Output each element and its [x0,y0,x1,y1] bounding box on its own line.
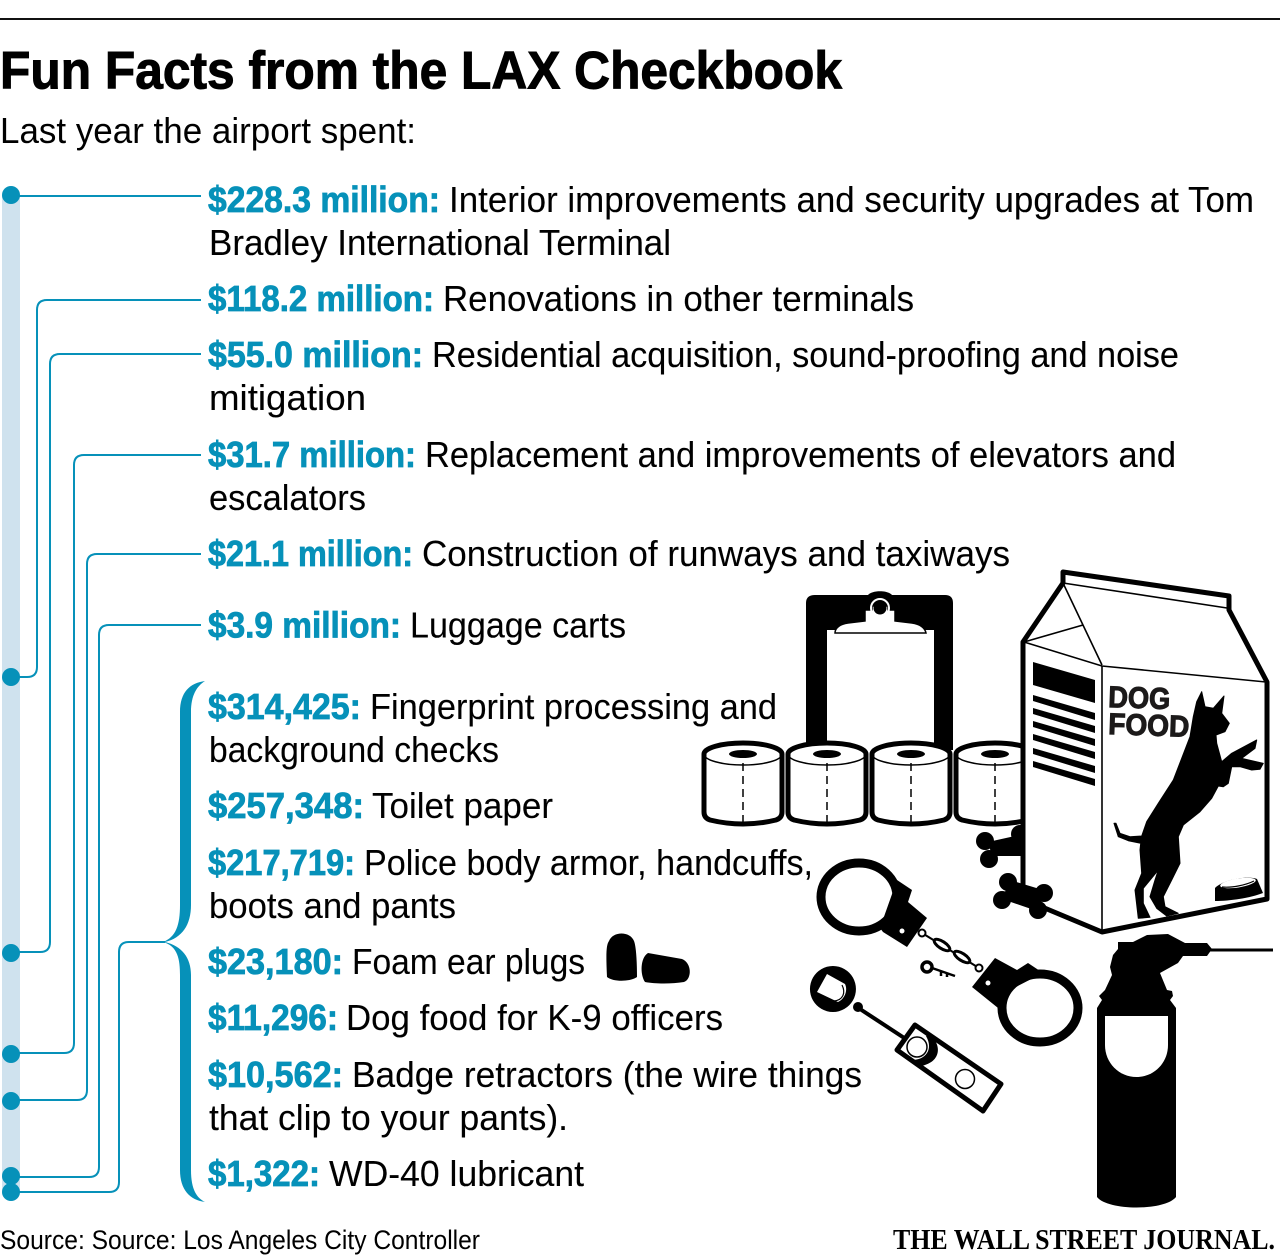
item: $55.0 million: mitigation [209,377,366,418]
dog silhouette [1114,692,1263,918]
item: $55.0 million [208,334,1179,418]
item: $11,296: $11,296: [208,997,338,1038]
key [922,962,955,977]
item: $55.0 million: Residential acquisition, sound-proofing and noise [432,334,1179,375]
icon: dog food carton [1023,572,1267,932]
item: $3.9 million: Luggage carts [410,604,626,646]
item: $257,348: Toilet paper [372,785,553,826]
item: $257,348 [208,785,553,826]
item: $228.3 million: $228.3 million: [208,179,440,220]
item: $314,425: $314,425: [208,686,361,727]
item: $23,180 [208,941,585,982]
item: $217,719: $217,719: [208,842,355,883]
item: $118.2 million: $118.2 million: [208,278,434,319]
icon: foam ear plugs [606,934,690,984]
carton label [1108,681,1190,744]
item: $314,425 [208,686,777,770]
item: $228.3 million: Interior improvements and security upgrades at Tom [449,179,1254,220]
item: $314,425: background checks [209,729,499,770]
item: $21.1 million: Construction of runways and taxiways [422,533,1010,574]
icon: WD-40 can [1097,934,1273,1208]
subtitle: Last year the airport spent: [0,110,416,151]
icon: toilet paper rolls [704,743,1034,824]
item: $23,180: Foam ear plugs [352,941,585,982]
dog bowl [1215,876,1263,901]
icon: badge retractor [810,966,1001,1111]
item: $10,562: that clip to your pants). [209,1097,568,1138]
item: $31.7 million: $31.7 million: [208,434,416,475]
chain [918,930,982,972]
item: $10,562: $10,562: [208,1054,343,1095]
item: $10,562: Badge retractors (the wire things [352,1054,862,1095]
source note: Source: Source: Los Angeles City Controller [0,1225,480,1255]
item: $10,562 [208,1054,862,1138]
title: Fun Facts from the LAX Checkbook [0,42,842,100]
item: $31.7 million: Replacement and improvements of elevators and [425,434,1176,475]
item: $228.3 million: Bradley International Terminal [209,222,671,263]
item: $11,296: Dog food for K-9 officers [346,997,723,1038]
item: $3.9 million [208,604,626,646]
carton label: FOOD [1108,708,1190,744]
item: $23,180: $23,180: [208,941,343,982]
item: $118.2 million: Renovations in other terminals [443,278,914,319]
icon: dog bone behind carton [976,825,1029,868]
item: $31.7 million [208,434,1176,518]
item: $257,348: $257,348: [208,785,364,826]
icon: handcuffs [821,863,1078,1042]
item: $31.7 million: escalators [209,477,366,518]
item: $55.0 million: $55.0 million: [208,334,423,375]
item: $1,322: $1,322: [208,1153,320,1194]
item: $118.2 million [208,278,914,319]
item: $217,719: boots and pants [209,885,456,926]
item: $1,322 [208,1153,584,1194]
item: $217,719 [208,842,813,926]
item: $3.9 million: $3.9 million: [208,604,401,646]
item: $314,425: Fingerprint processing and [370,686,777,727]
icon: clipboard [806,591,953,750]
item: $1,322: WD-40 lubricant [329,1153,584,1194]
item: $21.1 million: $21.1 million: [208,533,413,574]
brace grouping smaller items [163,681,205,1202]
item: $228.3 million [208,179,1254,263]
timeline: vertical scale bar with connector lines [2,186,201,1201]
item: $217,719: Police body armor, handcuffs, [364,842,813,883]
icon: dog bone over carton [993,873,1053,919]
carton label: DOG [1108,681,1171,716]
